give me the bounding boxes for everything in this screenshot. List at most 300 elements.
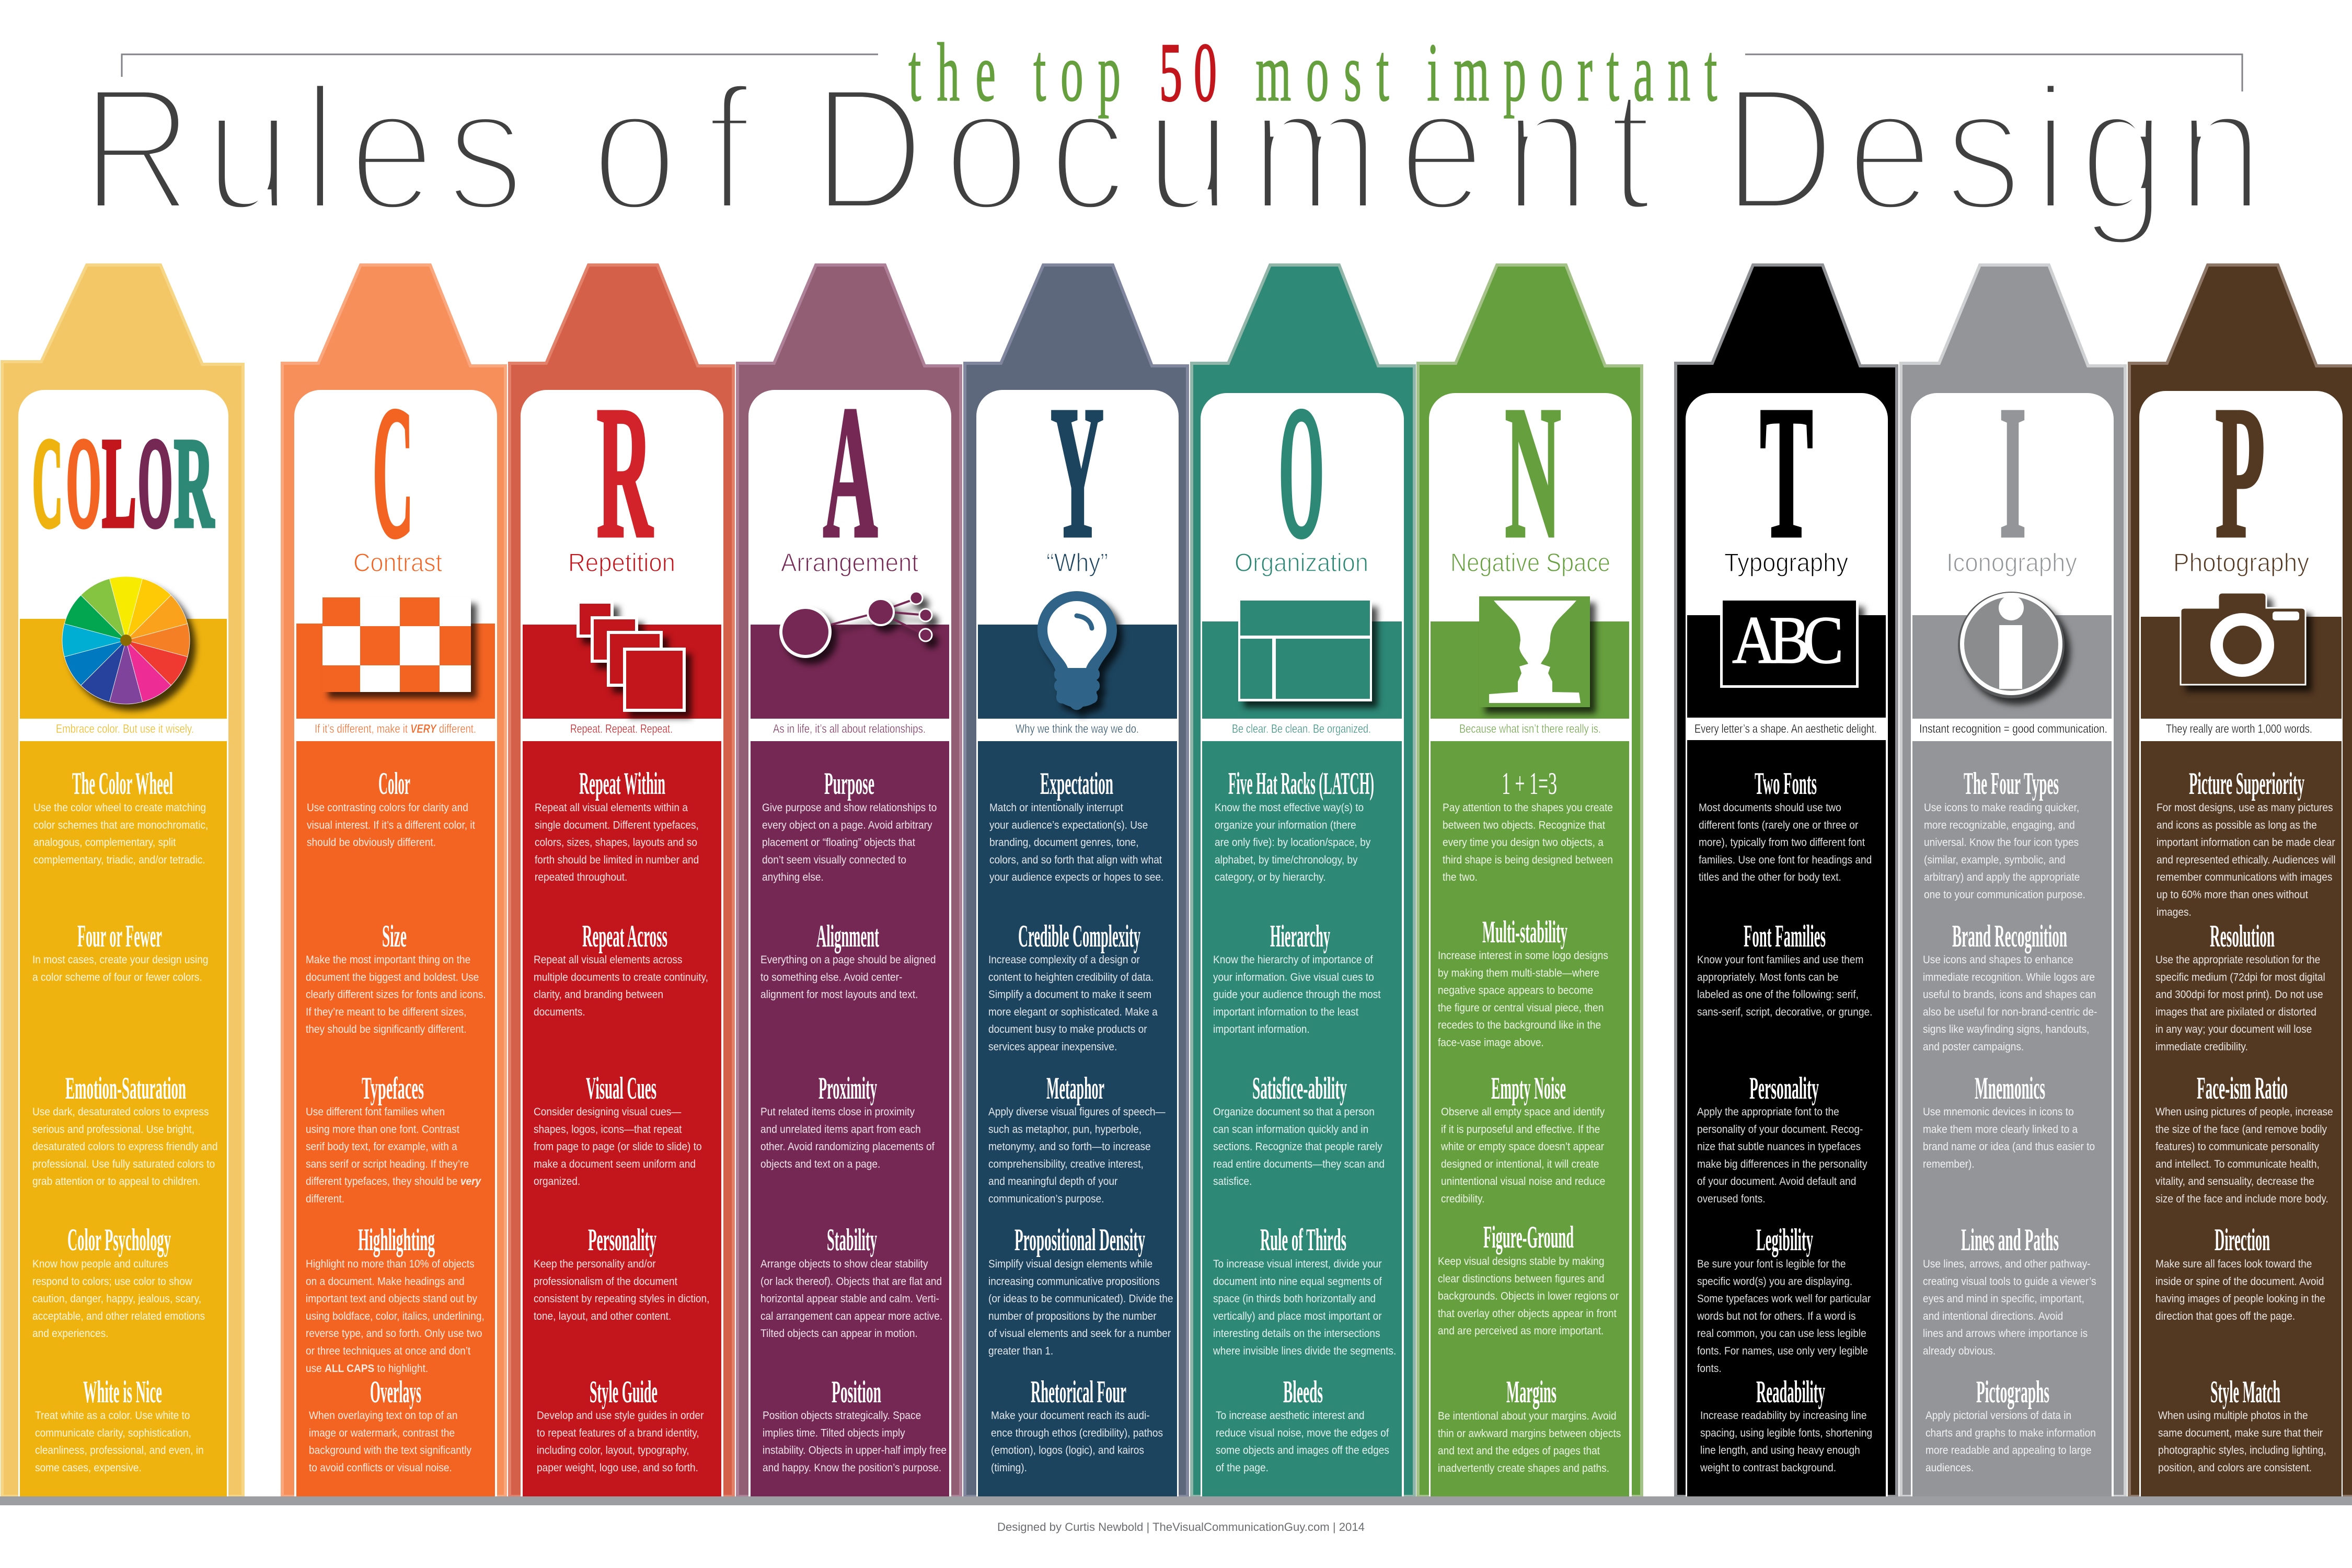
- panel: C Contrast crayon: [282, 265, 505, 1496]
- section: Metaphor: Metaphor: [1046, 1071, 1104, 1105]
- colour band: [296, 624, 495, 719]
- section: Typefaces: Use different font families when: [306, 1106, 445, 1118]
- text panel: [20, 741, 227, 1496]
- section: Pictographs: Apply pictorial versions of data in: [1926, 1410, 2071, 1422]
- section: Lines and Paths: Lines and Paths: [1961, 1223, 2059, 1257]
- section: Brand Recognition: useful to brands, icons and shapes can: [1923, 989, 2096, 1001]
- section: Pictographs: more readable and appealing to large: [1926, 1445, 2091, 1457]
- section: Alignment: to something else. Avoid center-: [760, 972, 902, 984]
- section: Metaphor: communication’s purpose.: [988, 1193, 1104, 1205]
- subtitle: the top 50 most important: most: [1255, 26, 1389, 119]
- section: Visual Cues: from page to page (or slide to slide) to: [534, 1141, 702, 1153]
- section: Face-ism Ratio: the size of the face (and remove bodily: [2155, 1124, 2327, 1136]
- section: Credible Complexity: document busy to make products or: [988, 1023, 1147, 1035]
- section: Typefaces: different typefaces, they should be very: [306, 1175, 481, 1187]
- section: Rhetorical Four: Make your document reach its audi-: [991, 1410, 1150, 1422]
- section: Credible Complexity: Simplify a document to make it seem: [988, 989, 1151, 1001]
- subtitle: the top 50 most important: important: [1427, 26, 1717, 119]
- section: Direction: [2155, 1223, 2325, 1322]
- section: Mnemonics: remember).: [1923, 1158, 1975, 1170]
- section: Emotion-Saturation: serious and professional. Use bright,: [32, 1124, 194, 1136]
- section: Lines and Paths: and intentional directions. Avoid: [1923, 1310, 2063, 1322]
- section: Proximity: other. Avoid randomizing placements of: [760, 1141, 935, 1153]
- heading: COLOR: O: [66, 411, 101, 554]
- section: Highlighting: using boldface, color, italics, underlining,: [306, 1310, 485, 1322]
- section: Margins: and text and the edges of pages that: [1438, 1445, 1600, 1457]
- section: Legibility: Some typefaces work well for particular: [1697, 1293, 1871, 1305]
- panel: R Repetition crayon: [510, 265, 733, 1496]
- crayon body: [1901, 265, 2125, 1496]
- section: Purpose: placement or “floating” objects that: [762, 837, 915, 849]
- white label: [18, 390, 228, 1496]
- section: Rhetorical Four: Rhetorical Four: [1031, 1375, 1126, 1409]
- section: Bleeds: To increase aesthetic interest and: [1216, 1410, 1364, 1422]
- section: 1 + 1=3: between two objects. Recognize that: [1443, 820, 1605, 832]
- word: Negative Space: Negative Space: [1450, 549, 1610, 577]
- section: Empty Noise: credibility.: [1441, 1193, 1484, 1205]
- section: Repeat Within: Repeat all visual elements within a: [535, 802, 688, 814]
- panel: Y Why crayon: [965, 265, 1187, 1496]
- section: Face-ism Ratio: When using pictures of people, increase: [2155, 1106, 2333, 1118]
- section: Multi-stability: by making them multi-stable—where: [1438, 967, 1599, 979]
- section: Bleeds: of the page.: [1216, 1462, 1269, 1474]
- section: Hierarchy: Know the hierarchy of importance of: [1213, 954, 1373, 966]
- icon: information symbol: [1958, 592, 2065, 698]
- letter R: R: [596, 367, 653, 577]
- section: The Color Wheel: complementary, triadic, and/or tetradic.: [33, 854, 205, 866]
- section: Credible Complexity: services appear inexpensive.: [988, 1041, 1117, 1053]
- section: Bleeds: Bleeds: [1283, 1375, 1323, 1409]
- section: Visual Cues: organized.: [534, 1175, 580, 1187]
- section: Propositional Density: (or ideas to be communicated). Divide the: [988, 1293, 1173, 1305]
- text panel: [2141, 741, 2342, 1496]
- section: Face-ism Ratio: size of the face and include more body.: [2155, 1193, 2328, 1205]
- section: Stability: (or lack thereof). Objects that are flat and: [760, 1276, 942, 1288]
- section: Rule of Thirds: vertically) and place most important or: [1213, 1310, 1382, 1322]
- section: Legibility: Legibility: [1756, 1223, 1813, 1257]
- section: Alignment: Alignment: [816, 919, 879, 953]
- section: Purpose: every object on a page. Avoid arbitrary: [762, 820, 932, 832]
- section: Highlighting: Highlighting: [358, 1223, 435, 1257]
- section: Brand Recognition: also be useful for non-brand-centric de-: [1923, 1006, 2097, 1018]
- section: Credible Complexity: more elegant or sophisticated. Make a: [988, 1006, 1158, 1018]
- section: Metaphor: and meaningful depth of your: [988, 1175, 1118, 1187]
- white label: [1201, 393, 1404, 1496]
- section: The Four Types: more recognizable, engaging, and: [1924, 820, 2075, 832]
- white label: [521, 390, 723, 1496]
- section: Expectation: colors, and so forth that align with what: [989, 854, 1162, 866]
- section: Typefaces: different.: [306, 1193, 344, 1205]
- section: Five Hat Racks (LATCH): Know the most effective way(s) to: [1215, 802, 1364, 814]
- section: Rule of Thirds: [1213, 1223, 1396, 1357]
- section: Four or Fewer: [32, 919, 208, 984]
- section: Emotion-Saturation: Use dark, desaturated colors to express: [32, 1106, 209, 1118]
- section: Mnemonics: Mnemonics: [1975, 1071, 2045, 1105]
- section: Figure-Ground: Figure-Ground: [1483, 1220, 1574, 1254]
- section: Repeat Across: [534, 919, 708, 1018]
- crayon body: [1192, 265, 1414, 1496]
- text panel: [1202, 741, 1402, 1496]
- section: Purpose: [762, 766, 937, 883]
- subtitle: the top 50 most important: [908, 26, 1717, 119]
- letter N: N: [1505, 367, 1561, 577]
- title: Rules of Document Design: [81, 50, 2264, 249]
- section: The Four Types: one to your communication purpose.: [1924, 889, 2085, 901]
- section: Legibility: words but not for others. If a word is: [1697, 1310, 1856, 1322]
- section: Satisfice-ability: sections. Recognize that people rarely: [1213, 1141, 1382, 1153]
- section: Highlighting: reverse type, and so forth. Only use two: [306, 1328, 482, 1340]
- section: Personality: Keep the personality and/or: [534, 1258, 656, 1270]
- section: Font Families: appropriately. Most fonts can be: [1697, 972, 1838, 984]
- section: Highlighting: on a document. Make headings and: [306, 1276, 465, 1288]
- colour band: [523, 625, 721, 719]
- section: Size: Size: [382, 919, 407, 953]
- section: 1 + 1=3: [1443, 766, 1613, 883]
- section: Satisfice-ability: Satisfice-ability: [1252, 1071, 1347, 1105]
- letter C: C: [373, 367, 413, 577]
- section: Resolution: specific medium (72dpi for most digital: [2155, 972, 2325, 984]
- section: Typefaces: serif body text, for example, with a: [306, 1141, 458, 1153]
- section: Picture Superiority: and represented ethically. Audiences will: [2157, 854, 2336, 866]
- section: Margins: Be intentional about your margins. Avoid: [1438, 1410, 1616, 1422]
- section: Color: [307, 766, 475, 849]
- heading: COLOR: C: [32, 412, 63, 554]
- section: White is Nice: communicate clarity, sophistication,: [35, 1427, 191, 1439]
- section: Proximity: Put related items close in proximity: [760, 1106, 915, 1118]
- section: Style Guide: Develop and use style guides in order: [537, 1410, 704, 1422]
- section: Mnemonics: brand name or idea (and thus easier to: [1923, 1141, 2095, 1153]
- section: Purpose: anything else.: [762, 871, 824, 883]
- text panel: [523, 741, 721, 1496]
- word: Typography: Typography: [1724, 549, 1848, 577]
- section: Metaphor: comprehensibility, creative interest,: [988, 1158, 1144, 1170]
- section: Propositional Density: of visual elements and seek for a number: [988, 1328, 1171, 1340]
- title: Rules of Document Design: Document: [812, 50, 1653, 248]
- section: The Four Types: (similar, example, symbolic, and: [1924, 854, 2066, 866]
- section: Style Guide: [537, 1375, 704, 1474]
- section: Two Fonts: Two Fonts: [1755, 766, 1817, 801]
- section: Satisfice-ability: satisfice.: [1213, 1175, 1252, 1187]
- section: Style Guide: paper weight, logo use, and so forth.: [537, 1462, 698, 1474]
- section: Figure-Ground: Keep visual designs stable by making: [1438, 1255, 1604, 1267]
- colour band: [978, 625, 1177, 719]
- section: Margins: Margins: [1506, 1375, 1557, 1409]
- section: Legibility: fonts. For names, use only very legible: [1697, 1345, 1868, 1357]
- section: Credible Complexity: Credible Complexity: [1018, 919, 1140, 953]
- subtitle: the top 50 most important: the: [908, 26, 996, 119]
- letter I: I: [2000, 367, 2026, 577]
- section: Color: Color: [378, 766, 410, 801]
- section: Lines and Paths: eyes and mind in specific, important,: [1923, 1293, 2084, 1305]
- section: Color Psychology: [32, 1223, 205, 1340]
- section: Highlighting: [306, 1223, 485, 1375]
- section: Repeat Within: colors, sizes, shapes, layouts and so: [535, 837, 697, 849]
- section: Five Hat Racks (LATCH): [1215, 766, 1374, 883]
- section: Visual Cues: Consider designing visual cues—: [534, 1106, 682, 1118]
- white label: [976, 390, 1179, 1496]
- section: Size: If they’re meant to be different sizes,: [306, 1006, 466, 1018]
- section: Rule of Thirds: space (in thirds both horizontally and: [1213, 1293, 1376, 1305]
- letter P: P: [2215, 368, 2265, 577]
- section: Multi-stability: the figure or central visual piece, then: [1438, 1002, 1604, 1014]
- icon: ABC box: [1720, 601, 1859, 688]
- section: Personality: consistent by repeating styles in diction,: [534, 1293, 709, 1305]
- section: Empty Noise: white or empty space doesn’t appear: [1440, 1141, 1604, 1153]
- section: Figure-Ground: that overlay other objects appear in front: [1438, 1308, 1617, 1320]
- section: Readability: line length, and using heavy enough: [1700, 1445, 1860, 1457]
- section: Bleeds: reduce visual noise, move the edges of: [1216, 1427, 1389, 1439]
- section: Resolution: Use the appropriate resolution for the: [2155, 954, 2320, 966]
- section: The Color Wheel: The Color Wheel: [72, 766, 173, 801]
- section: Readability: Increase readability by increasing line: [1700, 1410, 1866, 1422]
- section: 1 + 1=3: Pay attention to the shapes you create: [1443, 802, 1613, 814]
- section: Personality: Apply the appropriate font to the: [1697, 1106, 1839, 1118]
- section: Repeat Across: multiple documents to create continuity,: [534, 972, 708, 984]
- section: Picture Superiority: up to 60% more than ones without: [2157, 889, 2308, 901]
- section: Position: [763, 1375, 947, 1474]
- section: Hierarchy: guide your audience through the most: [1213, 989, 1381, 1001]
- tagline: Every letter’s a shape. An aesthetic delight.: [1694, 722, 1877, 735]
- tagline: They really are worth 1,000 words.: [2166, 722, 2312, 735]
- section: Hierarchy: important information.: [1213, 1023, 1310, 1035]
- white label: [748, 390, 951, 1496]
- section: Four or Fewer: a color scheme of four or fewer colors.: [32, 972, 202, 984]
- crayon body: [737, 265, 961, 1496]
- section: Lines and Paths: Use lines, arrows, and other pathway-: [1923, 1258, 2091, 1270]
- section: Font Families: labeled as one of the following: serif,: [1697, 989, 1859, 1001]
- section: Legibility: real common, you can use less legible: [1697, 1328, 1866, 1340]
- section: Multi-stability: Multi-stability: [1482, 915, 1567, 949]
- section: Personality: [1697, 1071, 1867, 1205]
- text panel: [1431, 741, 1629, 1496]
- title: Rules of Document Design: Design: [1723, 50, 2264, 249]
- section: Overlays: image or watermark, contrast the: [309, 1427, 455, 1439]
- section: Credible Complexity: Increase complexity of a design or: [988, 954, 1140, 966]
- section: Visual Cues: shapes, logos, icons—that repeat: [534, 1124, 682, 1136]
- section: Propositional Density: Propositional Density: [1014, 1223, 1145, 1257]
- section: Color: should be obviously different.: [307, 837, 436, 849]
- section: Lines and Paths: lines and arrows where importance is: [1923, 1328, 2088, 1340]
- section: Personality: nize that subtle nuances in typefaces: [1697, 1141, 1861, 1153]
- section: Color Psychology: Know how people and cultures: [32, 1258, 168, 1270]
- section: Style Guide: Style Guide: [590, 1375, 658, 1409]
- section: Legibility: specific word(s) you are displaying.: [1697, 1276, 1852, 1288]
- section: Two Fonts: titles and the other for body text.: [1699, 871, 1841, 883]
- section: Readability: [1700, 1375, 1872, 1474]
- section: Position: implies time. Tilted objects imply: [763, 1427, 905, 1439]
- section: Picture Superiority: and icons as possible as long as the: [2157, 820, 2317, 832]
- section: Alignment: alignment for most layouts and text.: [760, 989, 918, 1001]
- section: Direction: direction that goes off the page.: [2155, 1310, 2295, 1322]
- section: Color Psychology: respond to colors; use color to show: [32, 1276, 192, 1288]
- section: Color Psychology: acceptable, and other related emotions: [32, 1310, 205, 1322]
- white label: [2139, 391, 2343, 1496]
- section: Style Guide: including color, layout, typography,: [537, 1445, 689, 1457]
- section: Personality: of your document. Avoid default and: [1697, 1175, 1856, 1187]
- section: Figure-Ground: and are perceived as more important.: [1438, 1325, 1604, 1337]
- section: Satisfice-ability: Organize document so that a person: [1213, 1106, 1375, 1118]
- text panel: [296, 741, 495, 1496]
- section: Visual Cues: make a document seem uniform and: [534, 1158, 696, 1170]
- section: Brand Recognition: Brand Recognition: [1952, 919, 2067, 953]
- title: Rules of Document Design: Rules: [81, 50, 524, 248]
- section: Proximity: [760, 1071, 935, 1170]
- section: Satisfice-ability: [1213, 1071, 1385, 1187]
- subtitle: the top 50 most important: top: [1033, 26, 1121, 119]
- section: Rule of Thirds: document into nine equal segments of: [1213, 1276, 1382, 1288]
- section: Lines and Paths: already obvious.: [1923, 1345, 1996, 1357]
- section: Direction: inside or spine of the document. Avoid: [2155, 1276, 2324, 1288]
- panel: P Photography crayon: [2129, 265, 2352, 1496]
- section: Expectation: your audience’s expectation(s). Use: [989, 820, 1148, 832]
- icon: light bulb: [1037, 591, 1117, 710]
- icon: stacked pages: [578, 602, 684, 710]
- section: Visual Cues: [534, 1071, 702, 1187]
- section: Figure-Ground: [1438, 1220, 1619, 1337]
- section: The Four Types: The Four Types: [1964, 766, 2059, 801]
- section: Metaphor: [988, 1071, 1166, 1205]
- section: Personality: make big differences in the personality: [1697, 1158, 1867, 1170]
- section: Rhetorical Four: [991, 1375, 1163, 1474]
- section: Two Fonts: more), typically from two different font: [1699, 837, 1865, 849]
- section: 1 + 1=3: third shape is being designed between: [1443, 854, 1613, 866]
- section: Four or Fewer: Four or Fewer: [77, 919, 162, 953]
- crayon body: [2, 265, 243, 1496]
- section: Rule of Thirds: interesting details on the intersections: [1213, 1328, 1380, 1340]
- section: Color: Use contrasting colors for clarity and: [307, 802, 468, 814]
- section: The Color Wheel: analogous, complementary, split: [33, 837, 176, 849]
- section: 1 + 1=3: the two.: [1443, 871, 1478, 883]
- section: Face-ism Ratio: [2155, 1071, 2333, 1205]
- panel: O Organization crayon: Five Hat Racks (LATCH): [1228, 766, 1374, 801]
- section: Stability: Arrange objects to show clear stability: [760, 1258, 928, 1270]
- footer credit: Designed by Curtis Newbold | TheVisualCommunicationGuy.com | 2014: [997, 1520, 1365, 1534]
- section: Proximity: objects and text on a page.: [760, 1158, 880, 1170]
- section: Emotion-Saturation: desaturated colors to express friendly and: [32, 1141, 218, 1153]
- icon: ABC box: ABC: [1732, 602, 1843, 677]
- panel: COLOR crayon: [2, 265, 243, 1496]
- word: Contrast: Contrast: [353, 549, 442, 577]
- section: Font Families: sans-serif, script, decorative, or grunge.: [1697, 1006, 1872, 1018]
- section: Font Families: [1697, 919, 1872, 1018]
- colour band: [1431, 621, 1629, 719]
- tagline: Repeat. Repeat. Repeat.: [570, 722, 673, 735]
- section: Rhetorical Four: (timing).: [991, 1462, 1027, 1474]
- word: Iconography: Iconography: [1946, 549, 2077, 577]
- section: Personality: Personality: [588, 1223, 656, 1257]
- panel: T Typography crayon: [1676, 265, 1897, 1496]
- section: Style Match: [2158, 1375, 2326, 1474]
- title: Rules of Document Design: of: [591, 50, 751, 248]
- crayon body: [510, 265, 733, 1496]
- section: Highlighting: Highlight no more than 10% of objects: [306, 1258, 475, 1270]
- section: Five Hat Racks (LATCH): alphabet, by time/chronology, by: [1215, 854, 1358, 866]
- section: Multi-stability: negative space appears to become: [1438, 985, 1593, 997]
- section: Proximity: Proximity: [818, 1071, 877, 1105]
- section: Brand Recognition: and poster campaigns.: [1923, 1041, 2024, 1053]
- section: Stability: Stability: [827, 1223, 877, 1257]
- heading: COLOR: L: [102, 412, 136, 554]
- section: Visual Cues: Visual Cues: [586, 1071, 656, 1105]
- section: Color Psychology: caution, danger, happy, jealous, scary,: [32, 1293, 201, 1305]
- section: Expectation: your audience expects or hopes to see.: [989, 871, 1163, 883]
- section: Pictographs: charts and graphs to make information: [1926, 1427, 2096, 1439]
- section: Highlighting: important text and objects stand out by: [306, 1293, 477, 1305]
- section: Satisfice-ability: can scan information quickly and in: [1213, 1124, 1368, 1136]
- section: The Color Wheel: color schemes that are monochromatic,: [33, 820, 208, 832]
- section: Empty Noise: Observe all empty space and identify: [1441, 1106, 1605, 1118]
- section: Position: Position objects strategically. Space: [763, 1410, 921, 1422]
- section: Multi-stability: [1438, 915, 1608, 1049]
- section: Empty Noise: Empty Noise: [1491, 1071, 1566, 1105]
- section: Direction: Make sure all faces look toward the: [2155, 1258, 2312, 1270]
- section: Resolution: immediate credibility.: [2155, 1041, 2248, 1053]
- section: Readability: spacing, using legible fonts, shortening: [1700, 1427, 1872, 1439]
- section: Stability: [760, 1223, 942, 1340]
- crayon body: [1676, 265, 1897, 1496]
- section: Style Match: When using multiple photos in the: [2158, 1410, 2308, 1422]
- section: Two Fonts: [1699, 766, 1872, 883]
- section: Purpose: Purpose: [824, 766, 874, 801]
- section: Rule of Thirds: Rule of Thirds: [1260, 1223, 1346, 1257]
- section: Overlays: background with the text significantly: [309, 1445, 471, 1457]
- white label: [294, 390, 497, 1496]
- section: Legibility: fonts.: [1697, 1363, 1722, 1375]
- section: Expectation: [989, 766, 1163, 883]
- section: Two Fonts: families. Use one font for headings and: [1699, 854, 1872, 866]
- text panel: [751, 741, 949, 1496]
- section: Purpose: don’t seem visually connected to: [762, 854, 906, 866]
- tagline: As in life, it’s all about relationships.: [773, 722, 926, 735]
- section: Stability: Tilted objects can appear in motion.: [760, 1328, 918, 1340]
- section: Personality: tone, layout, and other content.: [534, 1310, 671, 1322]
- section: The Four Types: arbitrary) and apply the appropriate: [1924, 871, 2080, 883]
- section: Multi-stability: face-vase image above.: [1438, 1037, 1544, 1049]
- section: Repeat Within: repeated throughout.: [535, 871, 627, 883]
- section: White is Nice: Treat white as a color. Use white to: [35, 1410, 190, 1422]
- section: Propositional Density: number of propositions by the number: [988, 1310, 1157, 1322]
- section: Resolution: [2155, 919, 2325, 1053]
- text panel: [1687, 740, 1886, 1496]
- section: Empty Noise: if it is purposeful and effective. If the: [1441, 1124, 1600, 1136]
- section: The Four Types: Use icons to make reading quicker,: [1924, 802, 2079, 814]
- tagline: Instant recognition = good communication.: [1919, 722, 2107, 735]
- section: Lines and Paths: [1923, 1223, 2096, 1357]
- section: Face-ism Ratio: features) to communicate personality: [2155, 1141, 2319, 1153]
- section: Personality: [534, 1223, 709, 1322]
- section: Typefaces: Typefaces: [362, 1071, 424, 1105]
- section: Four or Fewer: In most cases, create your design using: [32, 954, 208, 966]
- subtitle: the top 50 most important: 50: [1159, 26, 1217, 119]
- title bracket: [122, 54, 2242, 91]
- word: Arrangement: Arrangement: [781, 549, 918, 577]
- section: Resolution: and 300dpi for most print). Do not use: [2155, 989, 2323, 1001]
- tagline: If it’s different, make it VERY different.: [315, 722, 476, 735]
- section: Repeat Across: documents.: [534, 1006, 585, 1018]
- section: Rule of Thirds: where invisible lines divide the segments.: [1213, 1345, 1396, 1357]
- section: Hierarchy: your information. Give visual cues to: [1213, 972, 1374, 984]
- section: Position: Position: [832, 1375, 881, 1409]
- section: Color Psychology: and experiences.: [32, 1328, 108, 1340]
- section: Emotion-Saturation: [32, 1071, 218, 1187]
- section: Multi-stability: recedes to the background like in the: [1438, 1019, 1601, 1031]
- section: Overlays: [309, 1375, 471, 1474]
- section: Empty Noise: [1440, 1071, 1605, 1205]
- tagline: Embrace color. But use it wisely.: [56, 722, 194, 735]
- section: Mnemonics: [1923, 1071, 2095, 1170]
- section: Size: they should be significantly different.: [306, 1023, 466, 1035]
- section: Picture Superiority: remember communications with images: [2157, 871, 2332, 883]
